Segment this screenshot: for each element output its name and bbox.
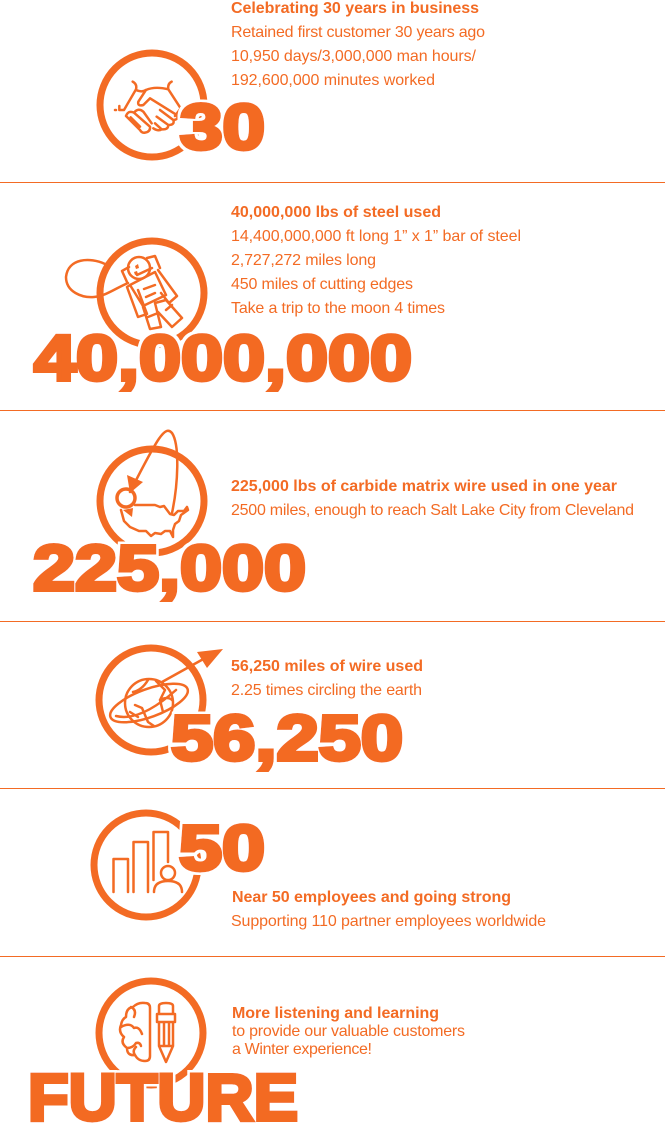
text block: 30 years: Retained first customer 30 years ago bbox=[231, 24, 485, 41]
number: 50: 50 bbox=[179, 812, 265, 884]
icon: brain and pencil in circle bbox=[99, 981, 203, 1085]
text block: 30 years bbox=[231, 0, 485, 89]
text block: future: to provide our valuable customers bbox=[232, 1023, 465, 1040]
text block: 30 years: 10,950 days/3,000,000 man hours/ bbox=[231, 48, 477, 65]
panel: carbide wire bbox=[33, 431, 634, 604]
icon: globe with arrow in circle bbox=[99, 648, 223, 752]
text block: employees: Near 50 employees and going strong bbox=[232, 889, 511, 906]
panel: future bbox=[28, 981, 465, 1134]
number: 40,000,000: 40,000,000 bbox=[34, 322, 412, 394]
text block: future: More listening and learning bbox=[232, 1005, 439, 1022]
text block: steel bbox=[231, 204, 521, 317]
text block: future bbox=[232, 1005, 465, 1058]
text block: carbide wire: 225,000 lbs of carbide matrix wire used in one year bbox=[231, 478, 617, 495]
text block: miles of wire: 56,250 miles of wire used bbox=[231, 658, 423, 675]
text block: 30 years: Celebrating 30 years in business bbox=[231, 0, 479, 17]
text block: employees: Supporting 110 partner employees worldwide bbox=[231, 913, 546, 930]
panel: employees bbox=[94, 812, 546, 930]
number: 225,000: 225,000 bbox=[33, 532, 306, 604]
text block: miles of wire bbox=[231, 658, 423, 699]
text block: steel: Take a trip to the moon 4 times bbox=[231, 300, 445, 317]
panel: miles of wire bbox=[99, 648, 423, 774]
word: FUTURE: FUTURE bbox=[28, 1060, 298, 1134]
text block: steel: 14,400,000,000 ft long 1” x 1” bar of steel bbox=[231, 228, 521, 245]
text block: miles of wire: 2.25 times circling the earth bbox=[231, 682, 422, 699]
text block: steel: 2,727,272 miles long bbox=[231, 252, 376, 269]
icon: bar chart and person in circle bbox=[94, 813, 198, 917]
panel: 30 years bbox=[100, 0, 485, 163]
icon: USA map in circle bbox=[100, 431, 204, 553]
number: 56,250: 56,250 bbox=[171, 702, 403, 774]
text block: employees bbox=[231, 889, 546, 930]
text block: 30 years: 192,600,000 minutes worked bbox=[231, 72, 435, 89]
text block: steel: 450 miles of cutting edges bbox=[231, 276, 413, 293]
icon: astronaut in circle bbox=[66, 241, 204, 345]
text block: steel: 40,000,000 lbs of steel used bbox=[231, 204, 441, 221]
panel: steel bbox=[34, 204, 521, 394]
text block: future: a Winter experience! bbox=[232, 1041, 372, 1058]
number: 30: 30 bbox=[180, 91, 265, 163]
icon: handshake in circle bbox=[100, 53, 204, 157]
text block: carbide wire bbox=[231, 478, 634, 519]
text block: carbide wire: 2500 miles, enough to reach Salt Lake City from Cleveland bbox=[231, 502, 634, 519]
